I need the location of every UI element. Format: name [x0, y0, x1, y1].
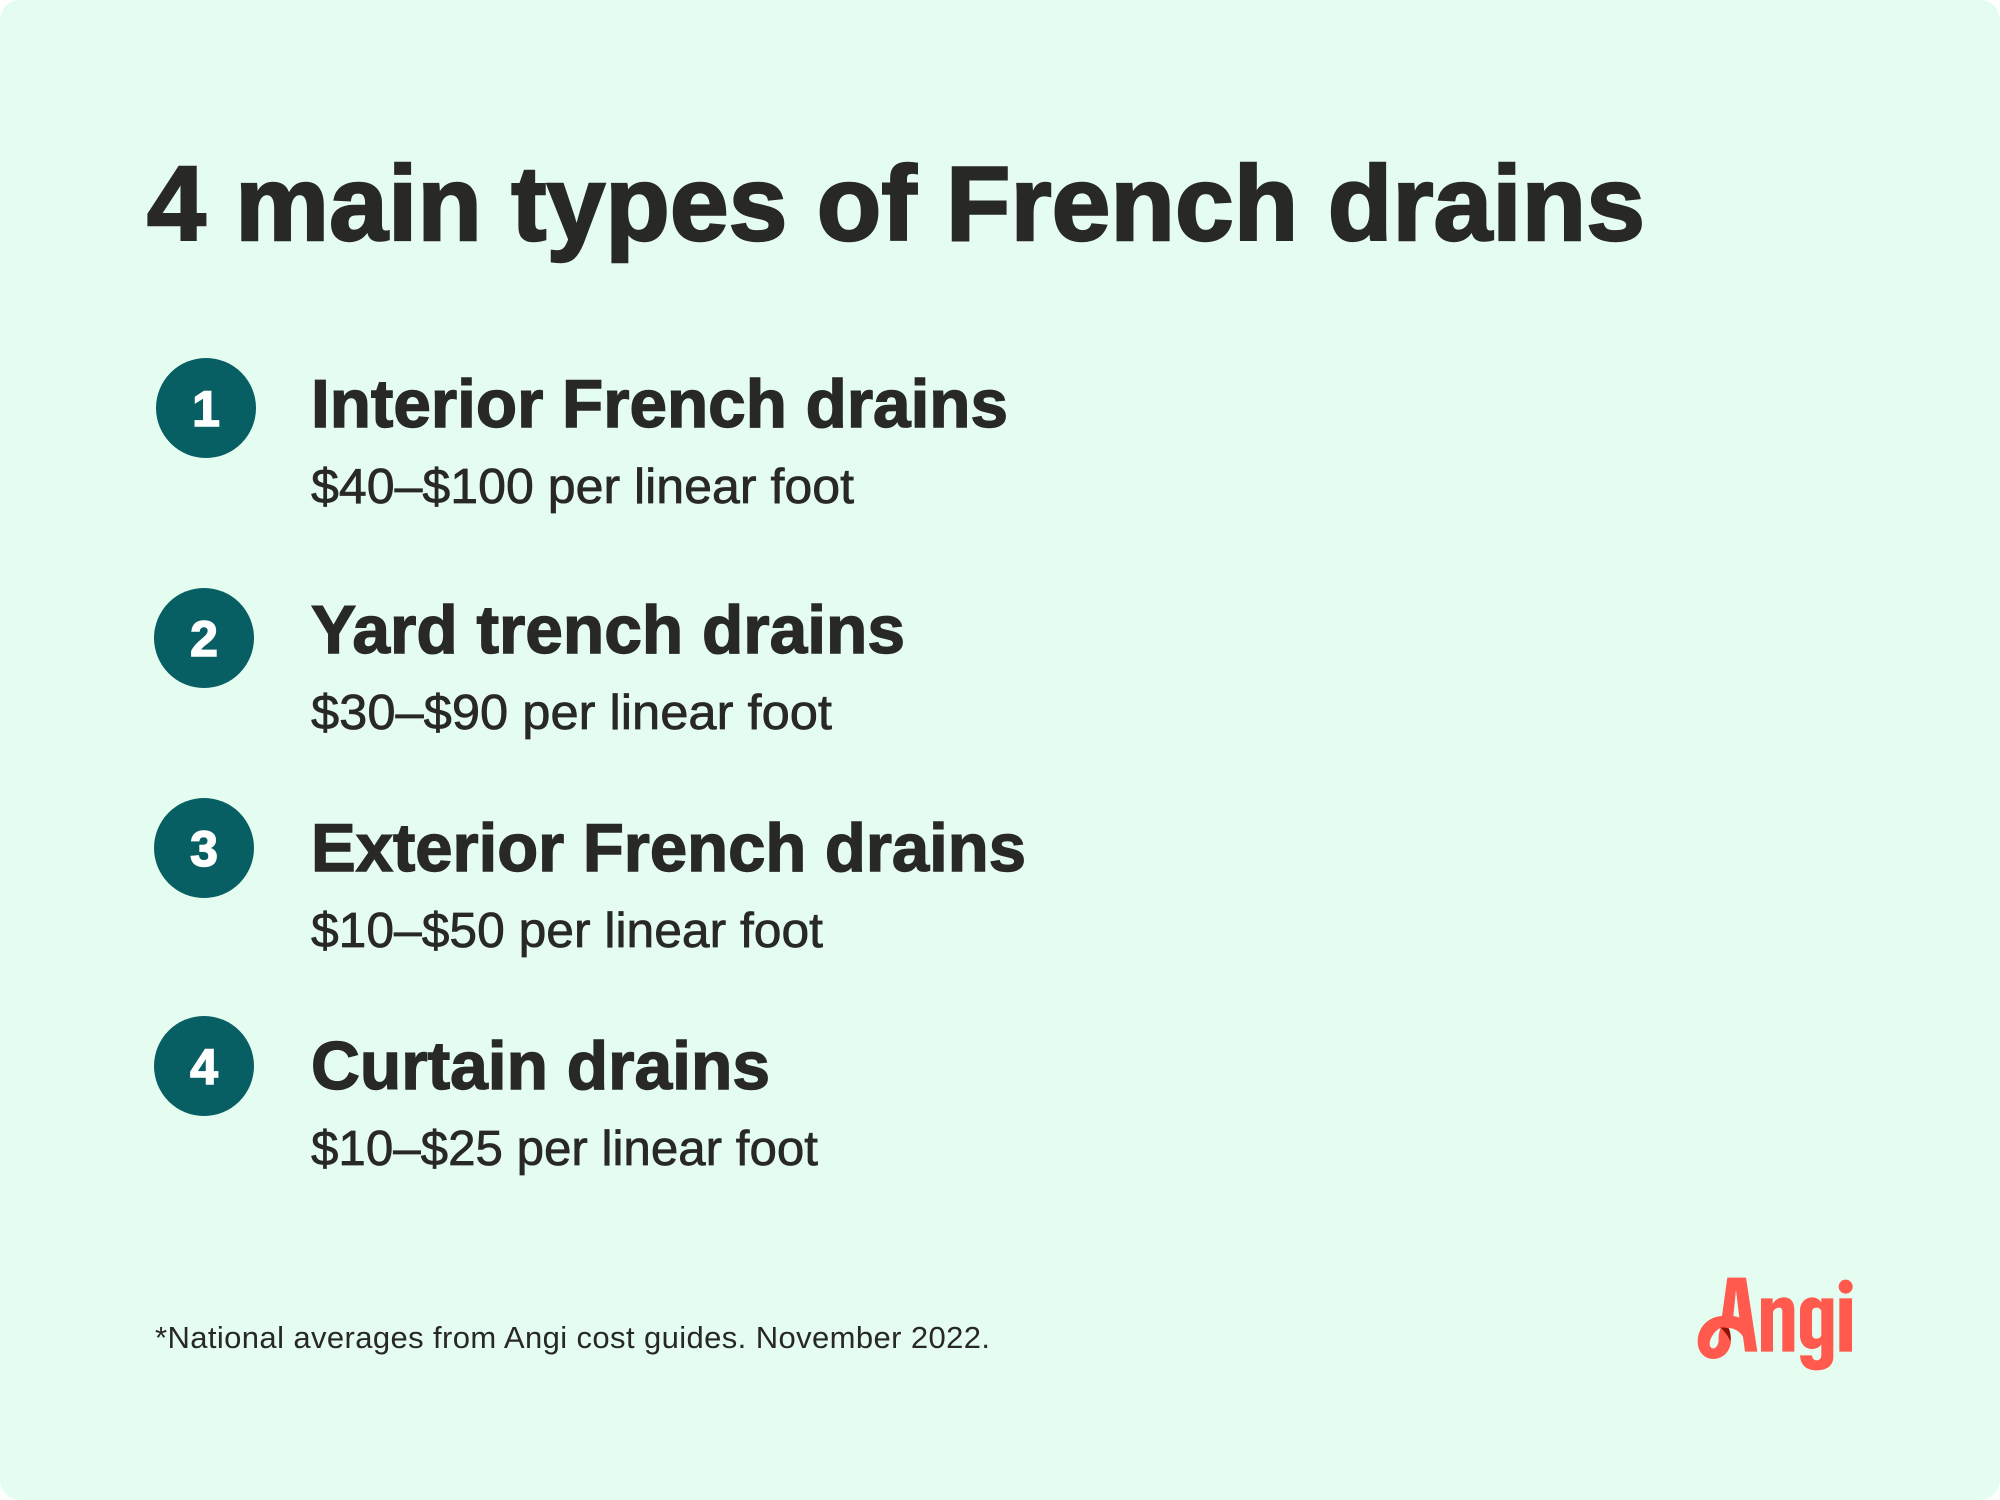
item 4 price: $10–$25 per linear foot: [311, 1122, 818, 1176]
number badge 3: [154, 798, 254, 898]
item 4 heading: Curtain drains: [311, 1028, 770, 1104]
footnote: *National averages from Angi cost guides. November 2022.: [155, 1320, 990, 1355]
number badge 1: [156, 358, 256, 458]
item 2 price: $30–$90 per linear foot: [311, 686, 832, 740]
number badge 4: [154, 1016, 254, 1116]
number badge 4: 4: [190, 1039, 218, 1095]
list item 3: Exterior French drains: [154, 798, 1026, 958]
item 2 heading: Yard trench drains: [311, 592, 905, 668]
number badge 2: 2: [190, 611, 218, 667]
item 3 price: $10–$50 per linear foot: [311, 904, 823, 958]
item 1 price: $40–$100 per linear foot: [311, 460, 854, 514]
list item 1: Interior French drains: [156, 358, 1008, 514]
number badge 1: 1: [192, 381, 220, 437]
title: 4 main types of French drains: [147, 145, 1645, 263]
list item 2: Yard trench drains: [154, 588, 905, 740]
item 1 heading: Interior French drains: [311, 366, 1008, 442]
item 3 heading: Exterior French drains: [311, 810, 1026, 886]
number badge 2: [154, 588, 254, 688]
number badge 3: 3: [190, 821, 218, 877]
list item 4: Curtain drains: [154, 1016, 818, 1176]
logo: Angi: [1698, 1278, 1853, 1370]
